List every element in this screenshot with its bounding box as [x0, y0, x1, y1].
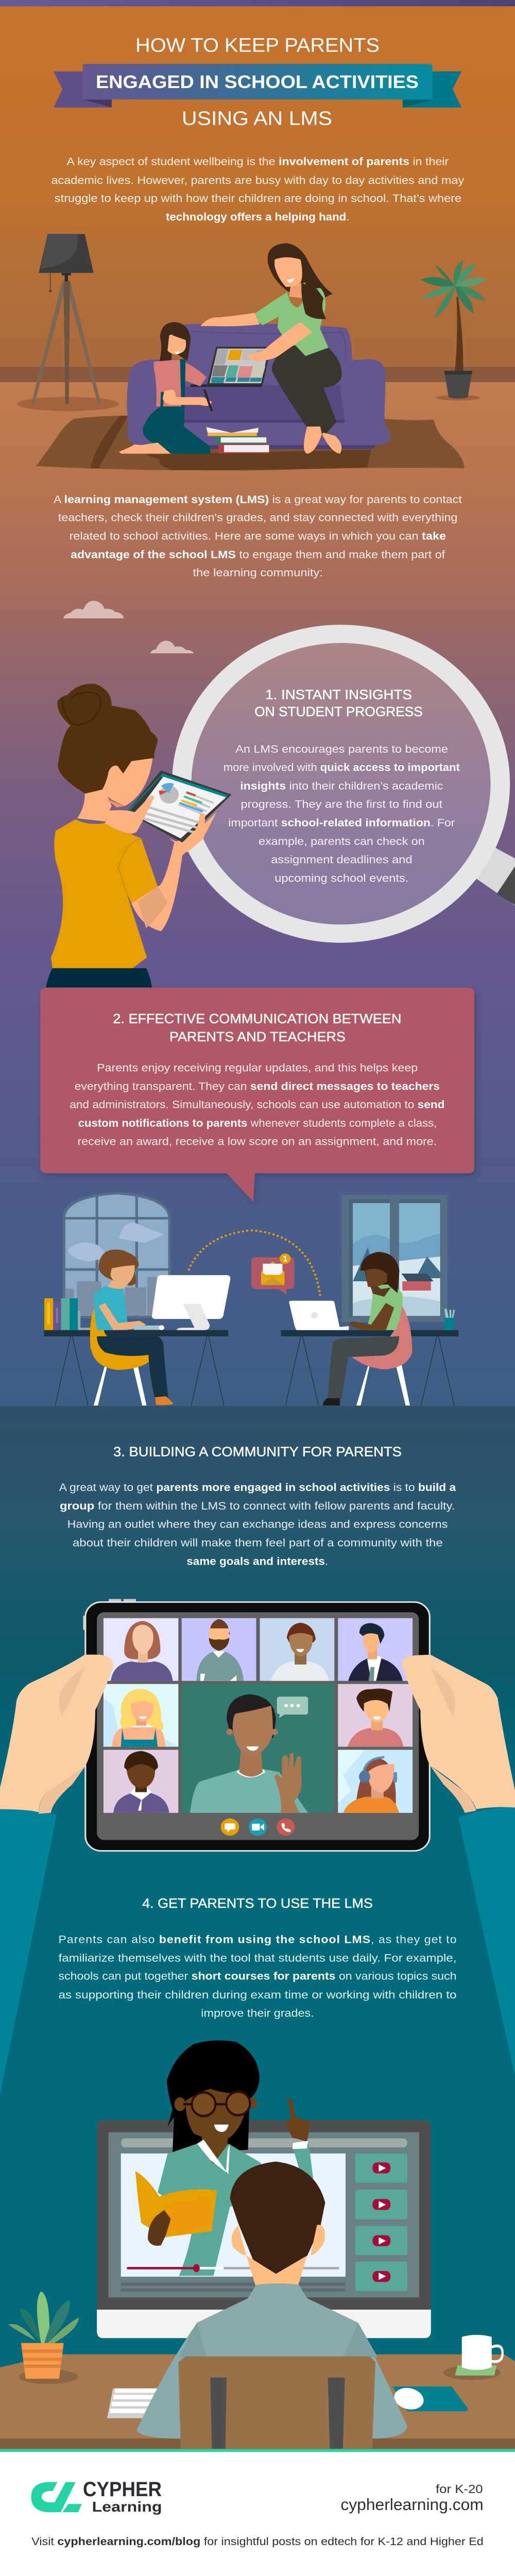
- body: custom notifications to parents whenever students complete a class,: [78, 1117, 437, 1129]
- monitor: [97, 2120, 431, 2338]
- right desk: [281, 1330, 458, 1405]
- parent: [200, 243, 342, 454]
- stack of books: [207, 427, 269, 453]
- body: schools can put together short courses for parents on various topics such: [59, 1970, 457, 1982]
- site info: [340, 2483, 484, 2514]
- participant: man in suit: [338, 1618, 413, 1681]
- woman with tablet: [51, 684, 232, 969]
- person at computer: [90, 1249, 174, 1405]
- message icon: 1: [283, 1255, 287, 1263]
- body: [224, 743, 460, 884]
- body: insights into their children’s academic: [240, 779, 443, 792]
- right hand: [401, 1655, 515, 1813]
- intro text block: technology offers a helping hand.: [166, 211, 350, 223]
- body: important school-related information. For: [228, 817, 455, 829]
- potted plant: [8, 2291, 79, 2384]
- device: [83, 1599, 430, 1851]
- body: An LMS encourages parents to become: [235, 743, 448, 755]
- footer: [0, 2449, 515, 2576]
- LMS text block: A learning management system (LMS) is a great way for parents to contact: [54, 493, 462, 505]
- intro text block: [52, 155, 465, 223]
- teacher: [135, 2040, 314, 2276]
- participant: woman purple top: [104, 1618, 178, 1681]
- woman's trousers: [46, 968, 152, 988]
- body: example, parents can check on: [259, 835, 425, 848]
- laptop: [289, 1301, 349, 1330]
- body: receive an award, receive a low score on an assignment, and more.: [78, 1135, 437, 1147]
- participant: woman with headset: [338, 1750, 413, 1813]
- body: and administrators. Simultaneously, schools can use automation to send: [70, 1098, 444, 1111]
- section 4: [59, 1895, 457, 2019]
- heading: PARENTS AND TEACHERS: [169, 1029, 346, 1044]
- ribbon banner: [54, 64, 461, 108]
- magnifying glass: [182, 634, 515, 934]
- heading: 4. GET PARENTS TO USE THE LMS: [142, 1895, 373, 1911]
- intro text block: A key aspect of student wellbeing is the involvement of parents in their: [67, 155, 449, 168]
- left hand: [0, 1655, 113, 1814]
- LMS text block: the learning community:: [193, 566, 323, 579]
- desk: [0, 2354, 515, 2439]
- heading: 3. BUILDING A COMMUNITY FOR PARENTS: [113, 1444, 402, 1459]
- heading: ON STUDENT PROGRESS: [254, 704, 423, 719]
- person at laptop: [322, 1252, 412, 1405]
- intro text block: academic lives. However, parents are busy with day to day activities and may: [52, 174, 465, 187]
- tablet on sofa: [191, 347, 271, 387]
- heading: [113, 1011, 401, 1044]
- square snowy window: [341, 1195, 448, 1322]
- coffee mug: [443, 2335, 503, 2380]
- title: HOW TO KEEP PARENTS: [135, 35, 380, 56]
- mouse pad and mouse: [392, 2386, 468, 2412]
- speech bubble card: [40, 988, 474, 1202]
- clouds: [63, 601, 194, 653]
- desk front edge: [0, 2438, 515, 2449]
- body: everything transparent. They can send direct messages to teachers: [75, 1080, 440, 1093]
- participant: boy purple shirt: [104, 1750, 178, 1813]
- participant: blonde woman: [104, 1684, 178, 1747]
- title: USING AN LMS: [182, 108, 332, 129]
- site info: cypherlearning.com: [340, 2496, 484, 2514]
- child: [119, 322, 212, 454]
- body: A great way to get parents more engaged in school activities is to build a: [59, 1481, 456, 1494]
- intro text block: struggle to keep up with how their children are doing in school. That’s where: [55, 192, 461, 205]
- section 1 illustration: [51, 601, 515, 969]
- body: as supporting their children during exam time or working with children to: [59, 1988, 457, 2001]
- heading: [254, 687, 423, 719]
- LMS text block: advantage of the school LMS to engage them and make them part of: [71, 548, 445, 561]
- body: Having an outlet where they can exchange ideas and express concerns: [67, 1518, 448, 1530]
- body: [59, 1933, 457, 2019]
- section 1 text: [224, 687, 460, 884]
- heading: 2. EFFECTIVE COMMUNICATION BETWEEN: [113, 1011, 401, 1026]
- body: group for them within the LMS to connect with fellow parents and faculty.: [60, 1500, 455, 1512]
- body: Parents enjoy receiving regular updates, and this helps keep: [97, 1061, 418, 1074]
- participant: young man pink shirt: [338, 1684, 413, 1747]
- section 3: [59, 1444, 456, 1567]
- logo: CYPHER: [83, 2478, 162, 2501]
- heading: 1. INSTANT INSIGHTS: [265, 687, 412, 702]
- logo: [31, 2478, 162, 2515]
- LMS text block: teachers, check their children's grades, and stay connected with everything: [58, 511, 457, 523]
- rug: [36, 416, 465, 470]
- body: upcoming school events.: [274, 872, 408, 884]
- left desk: [44, 1330, 228, 1405]
- video thumbnails: [355, 2154, 407, 2291]
- potted palm: [420, 260, 487, 400]
- section 2 illustration: parent and teacher: [44, 1193, 458, 1405]
- title: [54, 35, 461, 129]
- progress bar: [127, 2264, 339, 2272]
- visit line: Visit cypherlearning.com/blog for insightful posts on edtech for K-12 and Higher Ed: [31, 2535, 484, 2548]
- pencil cup: [444, 1309, 455, 1330]
- body: same goals and interests.: [186, 1555, 328, 1567]
- message icon: [251, 1253, 294, 1295]
- site info: for K-20: [436, 2483, 483, 2496]
- body: [70, 1061, 444, 1147]
- body: about their children will make them feel part of a community with the: [73, 1536, 443, 1549]
- desktop computer: [152, 1275, 230, 1330]
- arched window: [64, 1193, 169, 1317]
- dotted arc: [189, 1230, 320, 1296]
- books: [44, 1298, 94, 1330]
- body: more involved with quick access to important: [224, 761, 460, 773]
- body: [59, 1481, 456, 1567]
- section 4 illustration: online lesson: [0, 2040, 515, 2449]
- title: ENGAGED IN SCHOOL ACTIVITIES: [96, 72, 419, 92]
- body: assignment deadlines and: [271, 853, 412, 866]
- LMS text block: [54, 493, 462, 579]
- logo mark: [31, 2482, 82, 2512]
- body: Parents can also benefit from using the school LMS, as they get to: [59, 1933, 457, 1945]
- arm sleeves: [0, 1806, 515, 2095]
- floor lamp: [17, 234, 119, 411]
- tablet video call: [0, 1599, 515, 1851]
- participant: main speaker: [182, 1684, 334, 1813]
- sofa: [127, 324, 390, 449]
- participant: bearded man: [182, 1618, 256, 1681]
- illustration: parent and child on sofa: [17, 234, 487, 470]
- student from behind: [136, 2162, 407, 2438]
- logo: Learning: [92, 2499, 162, 2515]
- body: improve their grades.: [201, 2007, 314, 2019]
- body: progress. They are the first to find out: [241, 798, 443, 810]
- participant: smiling man white shirt: [260, 1618, 334, 1681]
- call controls: [221, 1819, 295, 1836]
- keyboard: [107, 2388, 164, 2418]
- body: familiarize themselves with the tool that students use daily. For example,: [59, 1952, 457, 1964]
- office chair: [178, 2357, 375, 2449]
- LMS text block: related to school activities. Here are some ways in which you can take: [70, 530, 446, 542]
